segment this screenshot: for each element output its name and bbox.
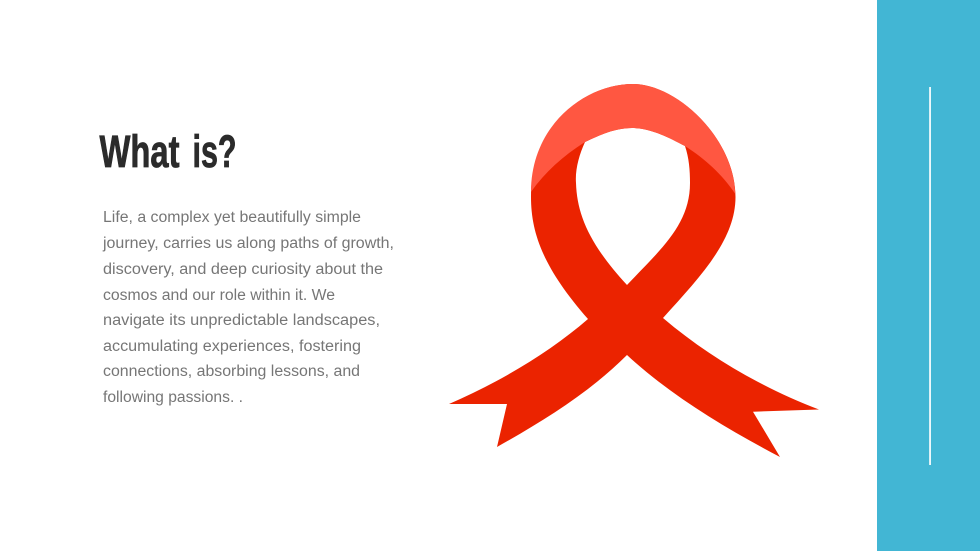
sidebar white vertical line <box>929 87 931 465</box>
body text block: accumulating experiences, fostering <box>103 338 361 355</box>
body text block <box>102 209 394 406</box>
body text block: navigate its unpredictable landscapes, <box>103 312 380 329</box>
body text block: connections, absorbing lessons, and <box>103 363 360 380</box>
ribbon main body <box>449 84 819 457</box>
body text block: Life, a complex yet beautifully simple <box>103 209 361 226</box>
body text block: journey, carries us along paths of growth, <box>102 235 394 252</box>
body text block: discovery, and deep curiosity about the <box>103 261 383 278</box>
body text block: following passions. . <box>103 389 243 406</box>
title: is? <box>192 126 236 177</box>
ribbon lighter top band <box>531 84 735 194</box>
body text block: cosmos and our role within it. We <box>103 287 335 304</box>
title: What <box>100 126 180 177</box>
icon: red awareness ribbon <box>449 84 819 457</box>
panel: blue sidebar <box>877 0 980 551</box>
